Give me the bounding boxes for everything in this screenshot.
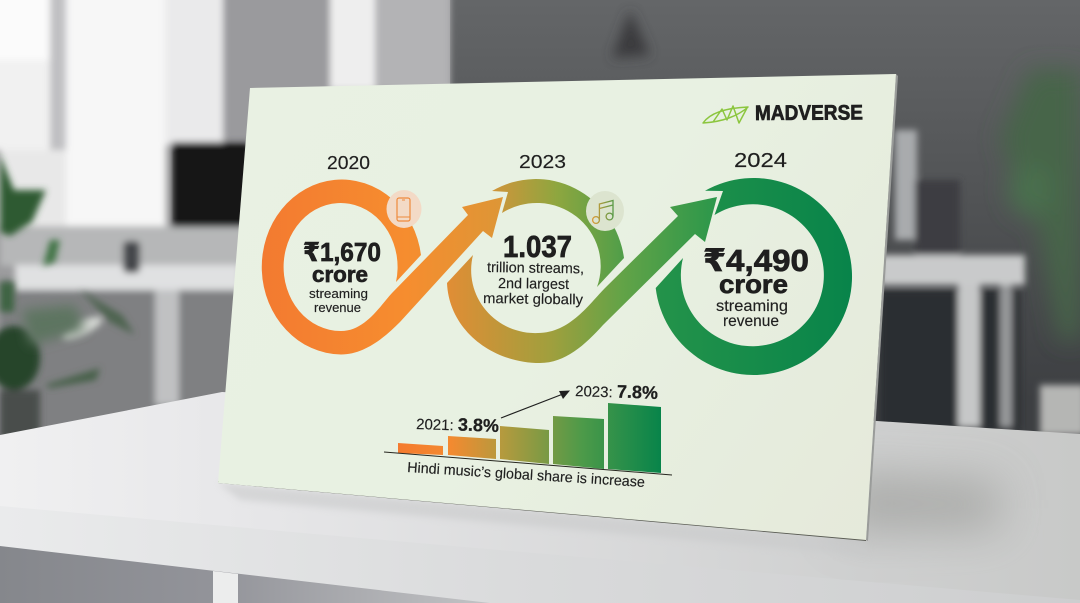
callout: 2024 value: streaming: [716, 298, 788, 315]
callout: 2023 value: trillion streams,: [487, 260, 584, 277]
wordmark: MADVERSE: [755, 101, 863, 125]
callout: 2024 value: crore: [719, 269, 788, 299]
year labels: 2020: [327, 153, 370, 173]
year labels: 2024: [734, 150, 787, 172]
loop segment: 2023 ring top: [492, 179, 624, 287]
loop segment: 2024 ring: [656, 178, 852, 375]
callout: 2024 value: [703, 243, 809, 330]
panel: poster card: [218, 74, 898, 541]
callout: 2024 value: revenue: [723, 313, 779, 330]
icon: phone: [386, 190, 422, 228]
callout: 2023 value: [483, 229, 584, 308]
callout: 2020 value: streaming: [309, 286, 368, 301]
bar chart: Hindi music global share: [384, 403, 672, 475]
chart caption: Hindi music’s global share is increase: [407, 460, 645, 491]
callout: 2023 value: market globally: [483, 291, 584, 308]
callout: 2023 value: 2nd largest: [498, 276, 569, 293]
loop segment: 2023 ring bottom and arrow: [447, 197, 717, 363]
icon: logo waveform: [703, 106, 748, 123]
icon: music note: [586, 191, 624, 231]
label: 2021 share: 2021: 3.8%: [416, 413, 499, 436]
year labels: [327, 150, 787, 173]
callout: 2024 value: ₹4,490: [703, 243, 809, 278]
callout: 2020 value: revenue: [314, 300, 361, 315]
loop segment: 2020 ring and arrow: [262, 180, 503, 354]
callout: 2023 value: 1.037: [503, 229, 572, 264]
callout: 2020 value: crore: [312, 262, 368, 287]
white table: [0, 392, 1080, 603]
callout: 2020 value: [303, 237, 381, 315]
arrow: growth trend: [501, 390, 570, 418]
logo: Madverse: [703, 101, 863, 125]
year labels: 2023: [519, 151, 566, 172]
label: 2023 share: 2023: 7.8%: [575, 380, 658, 403]
callout: 2020 value: ₹1,670: [303, 237, 381, 267]
